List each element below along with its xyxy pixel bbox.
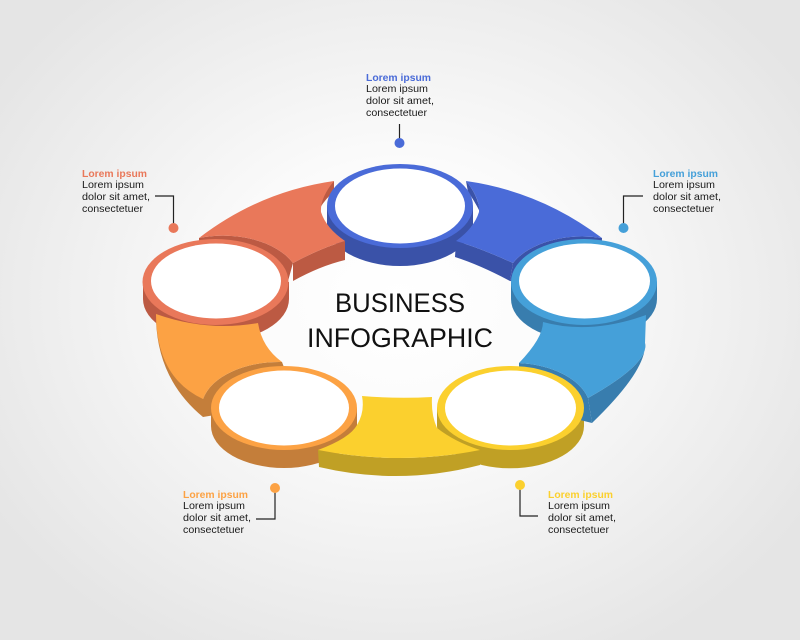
callout: red (82, 168, 178, 233)
callout: red: consectetuer (82, 203, 144, 215)
callout: red: Lorem ipsum (82, 179, 144, 191)
callout: light blue: Lorem ipsum (653, 168, 718, 180)
node: yellow circle (437, 366, 584, 450)
callout: orange: dolor sit amet, (183, 512, 251, 524)
title: INFOGRAPHIC (307, 323, 493, 353)
callout: light blue: dolor sit amet, (653, 191, 721, 203)
callout: light blue (618, 168, 721, 233)
callout: yellow: consectetuer (548, 524, 610, 536)
callout: red: Lorem ipsum (82, 168, 147, 180)
callout: light blue: consectetuer (653, 203, 715, 215)
callout: blue: dolor sit amet, (366, 95, 434, 107)
callout: blue: Lorem ipsum (366, 83, 428, 95)
side: orange node (211, 408, 357, 468)
callout: light blue: Lorem ipsum (653, 179, 715, 191)
callout: yellow: dolor sit amet, (548, 512, 616, 524)
callout: orange (183, 483, 280, 536)
arrow: orange (156, 314, 285, 417)
title (307, 288, 493, 353)
arrow: light blue (519, 315, 646, 423)
side: blue node (327, 206, 473, 266)
callout: yellow (515, 480, 616, 536)
arrow: blue (455, 181, 602, 292)
title: BUSINESS (335, 288, 465, 318)
callout: orange: consectetuer (183, 524, 245, 536)
node: orange circle (211, 366, 357, 450)
node: red circle (142, 239, 288, 325)
arrow: red (199, 181, 345, 292)
node: blue circle (327, 164, 473, 248)
callout: blue: Lorem ipsum (366, 72, 431, 84)
callout: orange: Lorem ipsum (183, 489, 248, 501)
side: red node (143, 282, 289, 341)
callout: blue (366, 72, 434, 148)
callout: blue: consectetuer (366, 107, 428, 119)
side: light blue node (511, 282, 657, 341)
arrow: yellow (318, 396, 480, 476)
callout: orange: Lorem ipsum (183, 500, 245, 512)
side: yellow node (437, 408, 584, 468)
cylinder sides (143, 206, 657, 468)
callout: yellow: Lorem ipsum (548, 500, 610, 512)
callout: red: dolor sit amet, (82, 191, 150, 203)
callout: yellow: Lorem ipsum (548, 489, 613, 501)
node: light blue circle (511, 239, 657, 325)
